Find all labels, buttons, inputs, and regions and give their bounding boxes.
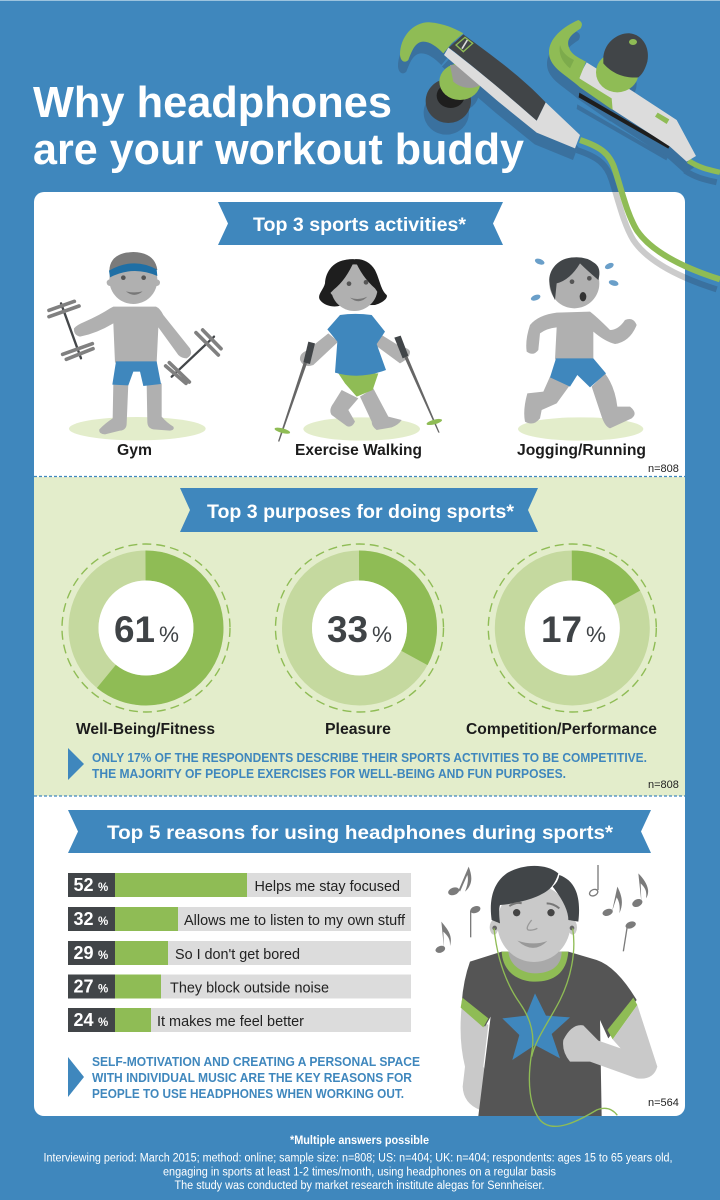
callout: key reasons: PEOPLE TO USE HEADPHONES WHEN WORKING OUT. <box>92 1086 404 1101</box>
icons: music notes <box>434 865 648 954</box>
sample size: purposes: n=808 <box>648 779 679 791</box>
title <box>33 78 525 174</box>
ribbon heading: top 5 reasons: Top 5 reasons for using headphones during sports* <box>107 823 614 844</box>
callout: key reasons <box>68 1054 420 1101</box>
panel: white content card <box>34 192 685 1116</box>
bar: feel better: It makes me feel better <box>157 1014 304 1030</box>
donut chart: 17 percent competition: % <box>586 622 606 647</box>
donut chart: 33 percent pleasure: Pleasure <box>325 721 391 738</box>
callout: key reasons: SELF-MOTIVATION AND CREATING A PERSONAL SPACE <box>92 1054 420 1069</box>
left earbud <box>400 22 580 148</box>
callout: key reasons: WITH INDIVIDUAL MUSIC ARE THE KEY REASONS FOR <box>92 1070 413 1085</box>
bar: feel better <box>68 1008 411 1032</box>
sample size: activities: n=808 <box>648 463 679 475</box>
bar: block outside noise: % <box>98 984 108 996</box>
donut chart: 61 percent well-being: Well-Being/Fitness <box>76 721 215 738</box>
donut chart: 17 percent competition: 17 <box>541 609 582 650</box>
bar: feel better: % <box>98 1017 108 1029</box>
donut chart: 33 percent pleasure <box>276 544 444 738</box>
bar: helps me stay focused: % <box>98 882 108 894</box>
figure: exercise walking: Exercise Walking <box>295 442 422 459</box>
figure: listener with earphones and music notes <box>434 865 657 1126</box>
footnote: The study was conducted by market research institute alegas for Sennheiser. <box>174 1180 544 1192</box>
figure: gym: Gym <box>117 442 152 459</box>
right earbud <box>549 20 696 162</box>
footnote: engaging in sports at least 1-2 times/month, using headphones on a regular basis <box>163 1166 556 1178</box>
bar: helps me stay focused <box>68 873 411 897</box>
bar: listen to my own stuff: % <box>98 916 108 928</box>
callout: competitive share: THE MAJORITY OF PEOPLE EXERCISES FOR WELL-BEING AND FUN PURPOSES. <box>92 766 566 781</box>
callout: competitive share <box>68 748 647 781</box>
bar: listen to my own stuff <box>68 907 411 931</box>
bar: block outside noise: 27 <box>74 976 94 996</box>
sample size: reasons: n=564 <box>648 1097 679 1109</box>
bar: listen to my own stuff: Allows me to listen to my own stuff <box>184 913 406 929</box>
headphones illustration <box>398 20 720 289</box>
title: Why headphones <box>33 78 392 127</box>
bar: block outside noise: They block outside noise <box>170 980 329 996</box>
figure: exercise walking <box>274 259 443 459</box>
title: are your workout buddy <box>33 125 525 174</box>
bar chart: reasons for using headphones <box>68 873 411 1032</box>
donut chart: 61 percent well-being <box>62 544 230 738</box>
donut chart: 33 percent pleasure: 33 <box>327 609 368 650</box>
figure: gym <box>49 252 221 459</box>
footnote <box>44 1135 672 1192</box>
bar: not bored <box>68 941 411 965</box>
figure: jogging <box>517 257 646 459</box>
bar: not bored: So I don't get bored <box>175 947 300 963</box>
donut chart: 17 percent competition: Competition/Performance <box>466 721 657 738</box>
figure: jogging: Jogging/Running <box>517 442 646 459</box>
donut chart: 33 percent pleasure: % <box>372 622 392 647</box>
callout: competitive share: ONLY 17% OF THE RESPONDENTS DESCRIBE THEIR SPORTS ACTIVITIES TO BE COMPETITIVE. <box>92 750 647 765</box>
ribbon heading: top 3 purposes <box>180 488 538 532</box>
bar: not bored: % <box>98 950 108 962</box>
donut chart: 61 percent well-being: % <box>159 622 179 647</box>
ribbon heading: top 3 sports activities: Top 3 sports activities* <box>253 215 467 236</box>
bar: helps me stay focused: 52 <box>74 875 94 895</box>
ribbon heading: top 3 purposes: Top 3 purposes for doing sports* <box>207 502 515 523</box>
bar: block outside noise <box>68 974 411 998</box>
bar: feel better: 24 <box>74 1010 94 1030</box>
footnote: *Multiple answers possible <box>290 1135 429 1147</box>
donut chart: 61 percent well-being: 61 <box>114 609 155 650</box>
earphone cable <box>494 928 617 1126</box>
ribbon heading: top 3 sports activities <box>218 202 503 245</box>
donut chart: 17 percent competition <box>466 544 657 738</box>
footnote: Interviewing period: March 2015; method: online; sample size: n=808; US: n=404; UK: n=404; respondents: ages 15 to 65 years old, <box>44 1152 672 1164</box>
bar: not bored: 29 <box>74 943 94 963</box>
bar: helps me stay focused: Helps me stay focused <box>254 879 400 895</box>
ribbon heading: top 5 reasons <box>68 810 651 853</box>
bar: listen to my own stuff: 32 <box>74 909 94 929</box>
